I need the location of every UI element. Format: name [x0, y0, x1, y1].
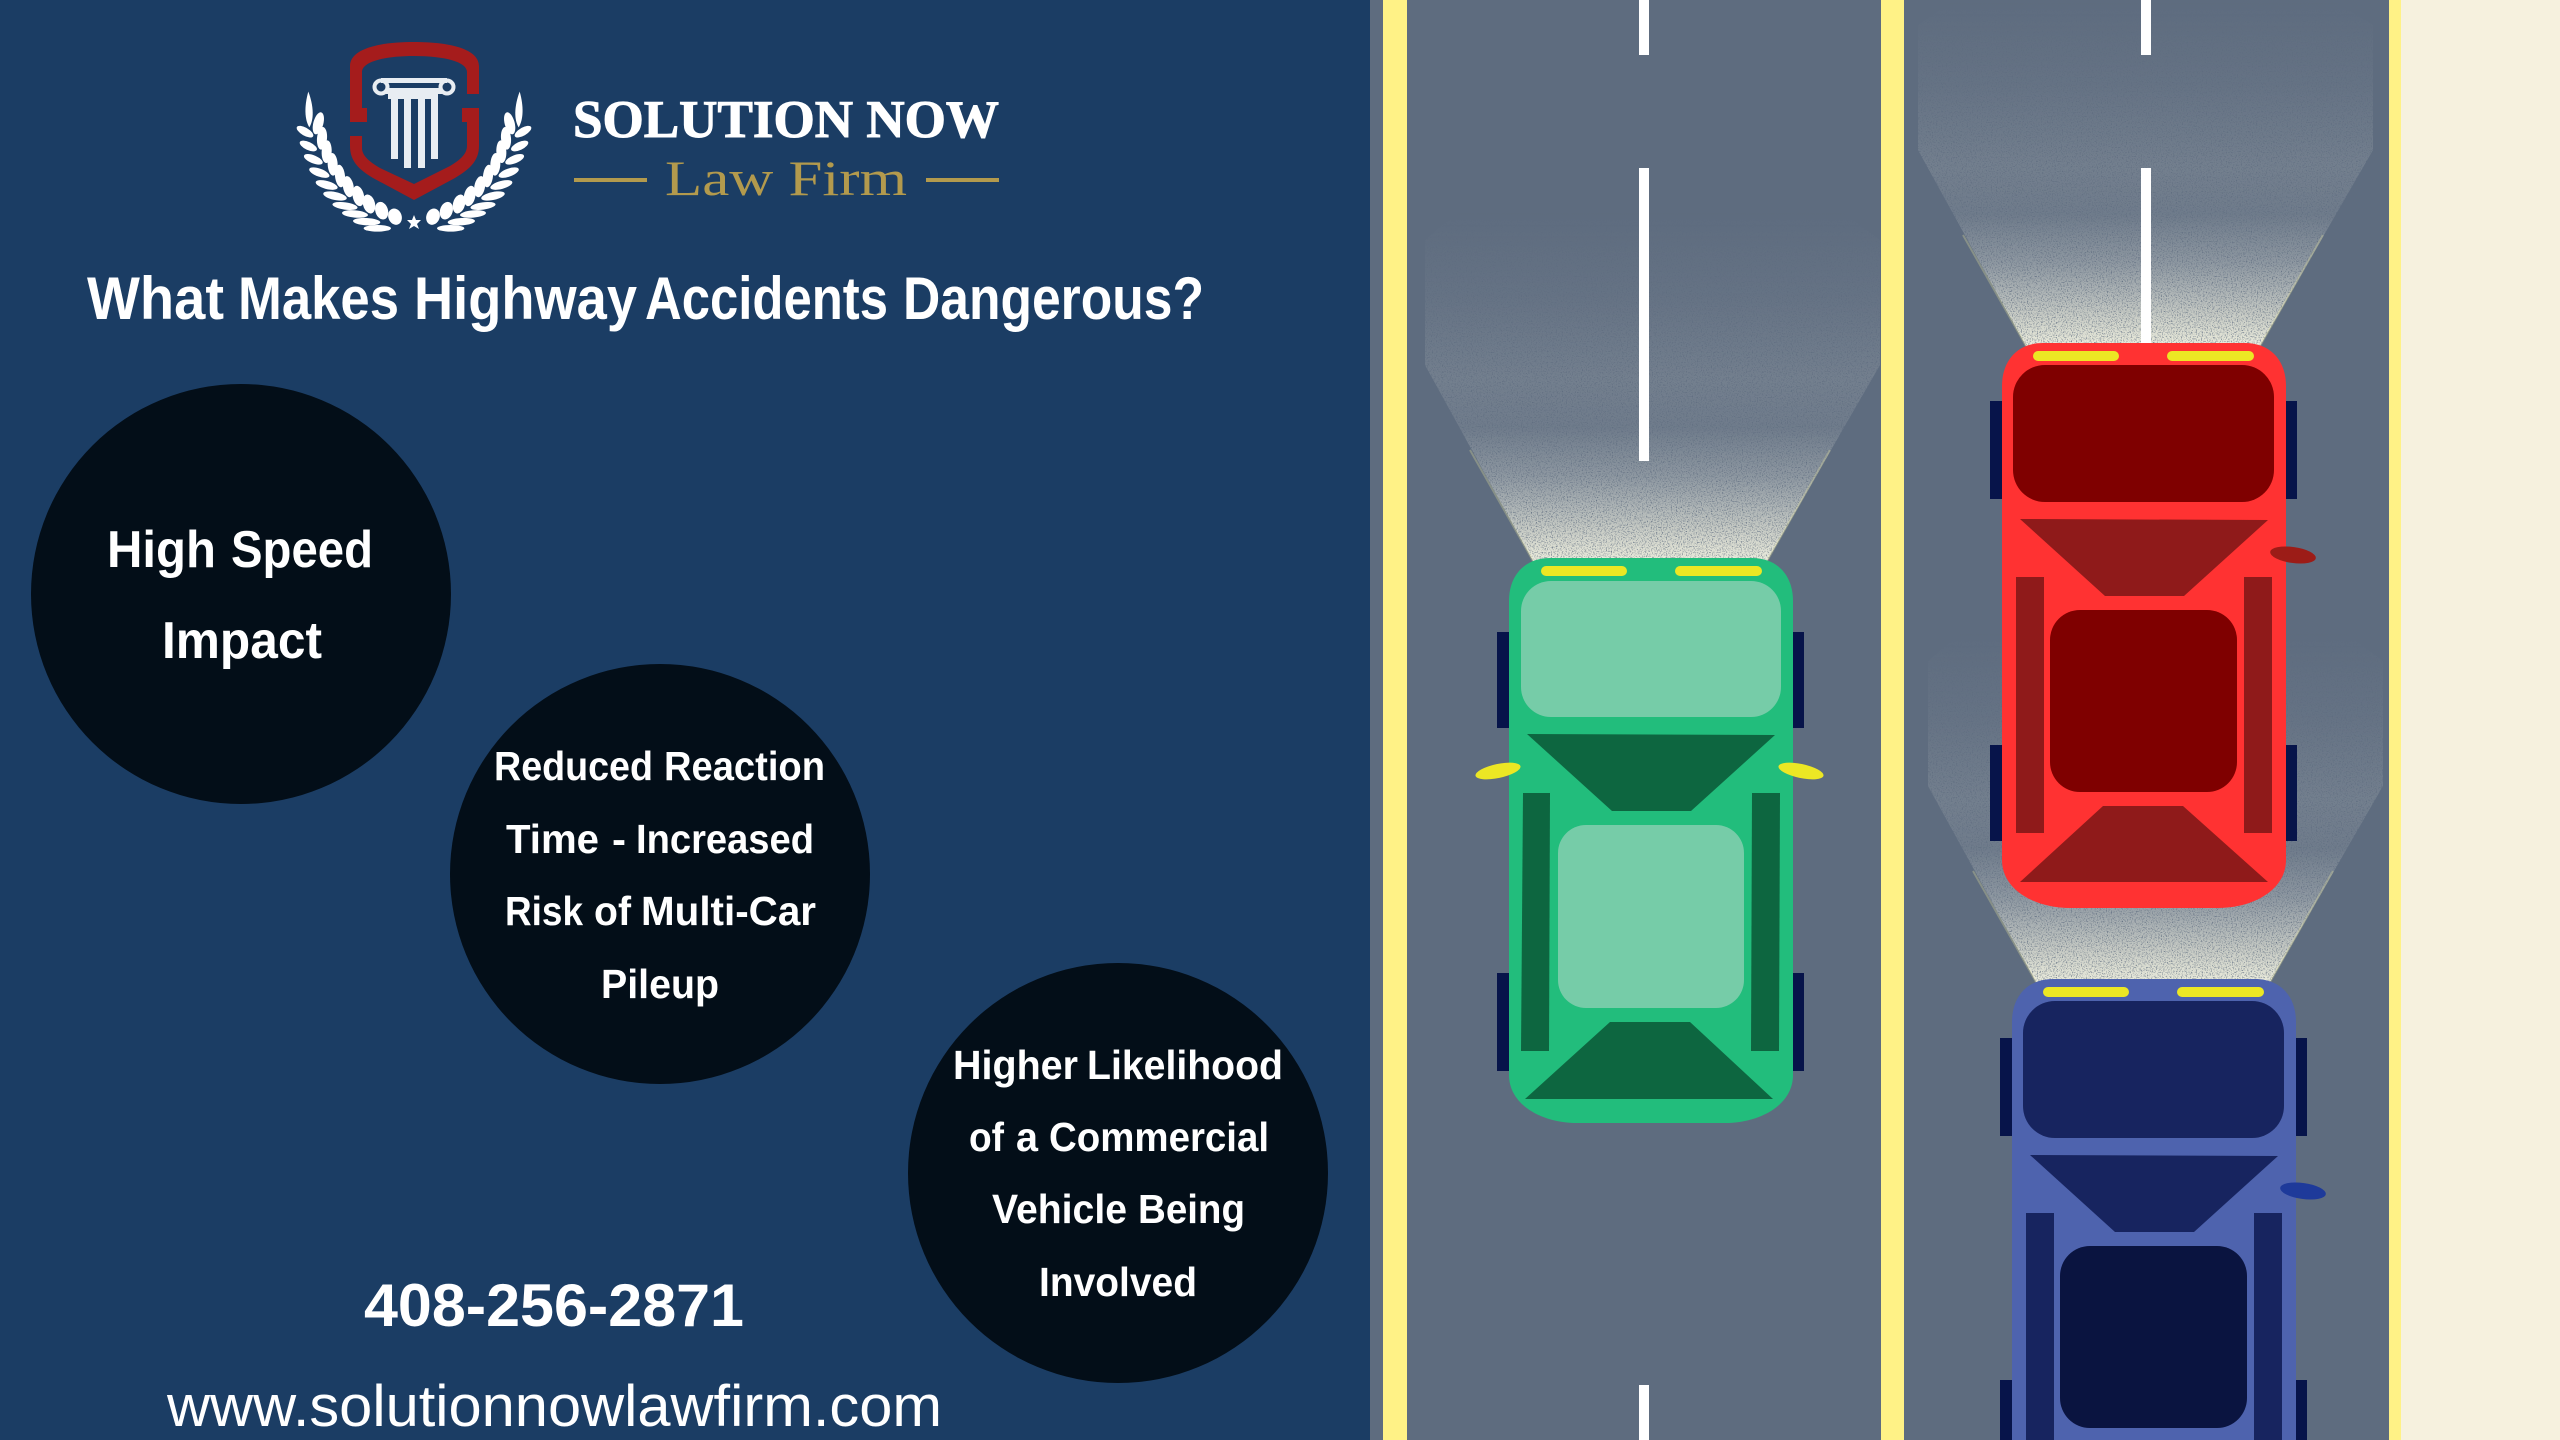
headlight beam: red car [1918, 0, 2373, 346]
wheels [1990, 401, 2297, 841]
logo rule left [574, 178, 647, 182]
mirror [2279, 1180, 2327, 1202]
headlights [2043, 987, 2264, 997]
headlights [2033, 351, 2254, 361]
roof [1558, 825, 1744, 1008]
circle: High Speed Impact: High [107, 521, 216, 579]
circle: Reduced Reaction Time [450, 664, 870, 1084]
red car [1990, 343, 2317, 908]
logo: Solution Now Law Firm [295, 42, 999, 232]
circle: Commercial Vehicle: Involved [1039, 1259, 1197, 1305]
circle: Commercial Vehicle: Likelihood [1087, 1042, 1283, 1088]
circle: High Speed Impact [31, 384, 451, 804]
circle: Commercial Vehicle: a [1016, 1114, 1039, 1160]
green car [1474, 558, 1825, 1123]
windshield [2023, 1001, 2284, 1138]
logo laurel left [295, 92, 404, 232]
blue car [2000, 979, 2327, 1440]
logo shield [350, 42, 479, 200]
headlight beam: blue car [1928, 631, 2383, 982]
car body [1509, 558, 1793, 1123]
roof [2060, 1246, 2247, 1428]
logo name: SOLUTION NOW [573, 91, 999, 149]
circle: Commercial Vehicle: Vehicle [992, 1186, 1127, 1232]
headlights [1541, 566, 1762, 576]
title [87, 265, 1204, 332]
circle: High Speed Impact: Impact [162, 612, 322, 670]
title: Dangerous? [903, 265, 1204, 332]
circle: Reduced Reaction Time: Increased [636, 816, 814, 862]
title: Highway [414, 265, 638, 332]
circle: Commercial Vehicle [908, 963, 1328, 1383]
circle: Reduced Reaction Time: - [612, 816, 626, 862]
dark panels [1521, 734, 1780, 1099]
windshield [2013, 365, 2274, 502]
car body [2002, 343, 2286, 908]
roof [2050, 610, 2237, 792]
mirror [2269, 544, 2317, 566]
circle: Commercial Vehicle: Commercial [1049, 1114, 1269, 1160]
wheels [1497, 632, 1804, 1071]
logo star [407, 215, 421, 229]
circle: Commercial Vehicle: Higher [953, 1042, 1078, 1088]
logo rule right [926, 178, 999, 182]
circle: Reduced Reaction Time: Reduced [494, 743, 653, 789]
circle: Commercial Vehicle: of [969, 1114, 1004, 1160]
dark panels [2016, 519, 2272, 882]
title: Makes [238, 265, 399, 332]
white lane dashes [1639, 0, 2151, 1440]
circle: Reduced Reaction Time: Risk [505, 888, 583, 934]
yellow lane lines [1383, 0, 2401, 1440]
logo column [374, 78, 454, 168]
title: What [87, 265, 224, 332]
phone number: 408-256-2871 [364, 1272, 744, 1339]
title: Accidents [645, 265, 888, 332]
mirrors [1474, 759, 1825, 783]
circle: Commercial Vehicle: Being [1138, 1186, 1245, 1232]
circle: Reduced Reaction Time: Reaction [664, 743, 825, 789]
logo laurel right [424, 92, 533, 232]
circle: High Speed Impact: Speed [231, 521, 373, 579]
circle: Reduced Reaction Time: Multi-Car [641, 888, 816, 934]
wheels [2000, 1038, 2307, 1440]
car body [2012, 979, 2296, 1440]
circle: Reduced Reaction Time: of [594, 888, 631, 934]
logo subtitle: Law Firm [665, 150, 907, 206]
roadside shoulder [2401, 0, 2560, 1440]
website: www.solutionnowlawfirm.com [166, 1374, 942, 1439]
headlight beam: green car [1425, 210, 1880, 561]
dark panels [2026, 1155, 2282, 1440]
left navy panel [0, 0, 1370, 1440]
circle: Reduced Reaction Time: Pileup [601, 961, 719, 1007]
circle: Reduced Reaction Time: Time [506, 816, 599, 862]
windshield [1521, 581, 1781, 717]
road surface [1370, 0, 2390, 1440]
